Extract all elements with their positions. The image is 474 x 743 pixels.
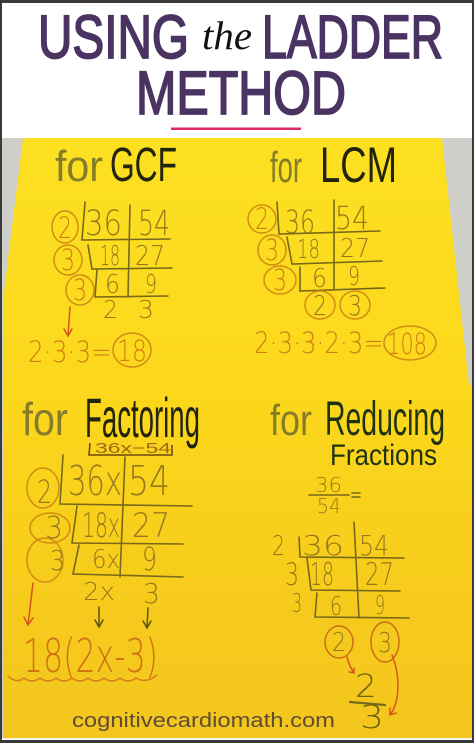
ladder grid: 18x	[82, 506, 120, 546]
title line one	[38, 3, 443, 71]
panel: for Factoring	[8, 386, 200, 683]
circled divisors	[27, 468, 70, 582]
title line one: the	[202, 13, 252, 58]
panel: for Reducing Fractions	[270, 393, 445, 736]
ladder grid: 2	[272, 529, 285, 562]
heading: for LCM: LCM	[320, 137, 397, 193]
panel: for LCM	[248, 137, 436, 361]
circled quotients: 3	[378, 626, 392, 659]
ladder grid: 54	[128, 457, 170, 505]
ladder grid: 27	[135, 239, 165, 272]
ladder grid: 2x	[83, 577, 115, 606]
result equation: 2·3·3=	[28, 335, 112, 369]
ladder grid: 27	[132, 506, 170, 546]
ladder grid: 54	[138, 204, 170, 244]
heading: for Reducing Fractions: for	[270, 396, 312, 445]
ladder grid: 2	[103, 295, 118, 324]
ladder grid	[60, 455, 192, 610]
ladder grid	[277, 199, 385, 294]
title banner	[2, 3, 472, 138]
circled divisors: 3	[45, 511, 63, 546]
circled divisors: 2	[37, 473, 52, 511]
panel: for GCF	[28, 139, 177, 369]
ladder grid	[82, 202, 172, 324]
fraction 36 over 54: 36	[315, 473, 342, 497]
circled divisors: 3	[273, 263, 287, 297]
circled quotients	[305, 289, 370, 322]
boxed expression	[89, 440, 172, 457]
reduced fraction 2 over 3	[350, 667, 385, 736]
ladder grid: 36	[85, 204, 122, 244]
result equation: 108	[387, 327, 427, 361]
reduced fraction 2 over 3: 3	[360, 698, 384, 736]
heading: for GCF: GCF	[110, 139, 177, 192]
heading: for Reducing Fractions	[270, 393, 445, 472]
ladder grid: 27	[365, 557, 394, 593]
circled quotients: 3	[348, 289, 362, 322]
ladder grid: 36x	[68, 457, 122, 505]
circled divisors	[52, 211, 94, 307]
heading: for Factoring: for	[22, 393, 68, 445]
heading: for Factoring	[22, 386, 200, 449]
arrow	[64, 307, 72, 336]
ladder grid: 9	[145, 270, 157, 300]
heading: for GCF: for	[55, 142, 103, 191]
ladder grid: 6	[312, 264, 327, 294]
circled divisors: 2	[255, 202, 269, 236]
ladder grid: 6x	[92, 545, 120, 575]
ladder grid: 6	[330, 592, 342, 622]
ladder grid: 18	[297, 235, 320, 265]
circled quotients: 2	[332, 628, 346, 658]
ladder grid: 6	[105, 270, 120, 300]
factored result: 18(2x-3)	[23, 629, 158, 683]
result equation: 2·3·3·2·3=	[254, 326, 384, 360]
pink underline	[171, 128, 301, 130]
factored result	[8, 629, 158, 683]
ladder grid	[272, 522, 409, 622]
website footer: cognitivecardiomath.com	[72, 710, 335, 732]
ladder grid: 9	[142, 540, 157, 578]
ladder grid: 27	[340, 234, 370, 264]
circled quotients: 2	[313, 289, 327, 322]
fraction 36 over 54	[309, 473, 360, 518]
ladder grid: 36	[285, 203, 315, 241]
title line one: USING	[38, 3, 189, 71]
heading: for Reducing Fractions: Fractions	[330, 439, 437, 472]
reduced fraction 2 over 3: 2	[355, 667, 377, 705]
ladder grid: 3	[138, 295, 154, 324]
circled quotients	[325, 622, 399, 662]
infographic: Factoring	[85, 386, 200, 449]
circled divisors: 3	[61, 243, 75, 277]
ladder grid: 3	[285, 557, 299, 593]
result equation: 18	[117, 334, 147, 368]
ladder grid: 18	[310, 557, 334, 593]
arrows	[24, 583, 151, 628]
circled divisors: 3	[50, 544, 65, 577]
arrows to reduced fraction	[347, 655, 398, 715]
boxed expression: 36x−54	[95, 440, 171, 457]
ladder grid: 36	[302, 529, 344, 562]
fraction 36 over 54: 54	[317, 494, 341, 518]
title line two: METHOD	[136, 59, 346, 127]
ladder grid: 54	[335, 199, 369, 237]
ladder grid: 54	[359, 529, 389, 562]
heading: for GCF	[55, 139, 177, 192]
heading: for LCM: for	[270, 143, 302, 192]
ladder grid: 3	[143, 577, 160, 610]
circled divisors: 3	[73, 273, 87, 307]
ladder grid: 3	[292, 589, 302, 619]
ladder grid: 18	[100, 239, 120, 272]
circled divisors: 3	[265, 233, 279, 267]
circled divisors: 2	[58, 211, 72, 245]
circled divisors	[248, 202, 296, 297]
ladder grid: 9	[375, 591, 385, 621]
ladder grid: 9	[348, 262, 360, 292]
heading: for LCM	[270, 137, 397, 193]
